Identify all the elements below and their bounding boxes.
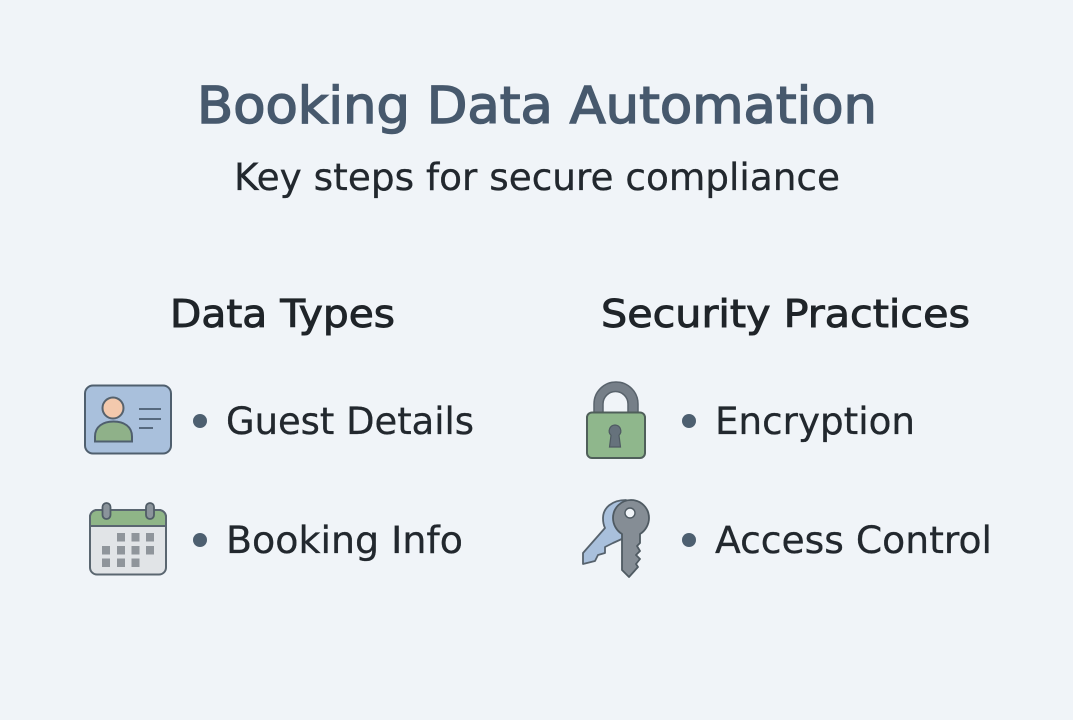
icon: padlock [587,382,645,458]
bullet: guest details [193,414,207,428]
label: encryption: Encryption [715,400,915,443]
icon: keys [583,500,649,577]
label: access control: Access Control [715,519,992,562]
bullet: booking info [193,533,207,547]
label: booking info: Booking Info [226,519,463,562]
title: Booking Data Automation [197,77,877,136]
icon: guest ID card [85,386,171,454]
bullet: access control [682,533,696,547]
bullet: encryption [682,414,696,428]
label: guest details: Guest Details [226,400,474,443]
icon: calendar [90,503,166,574]
heading: data types: Data Types [170,292,395,336]
heading: security practices: Security Practices [601,292,970,336]
subtitle: Key steps for secure compliance [234,156,840,199]
